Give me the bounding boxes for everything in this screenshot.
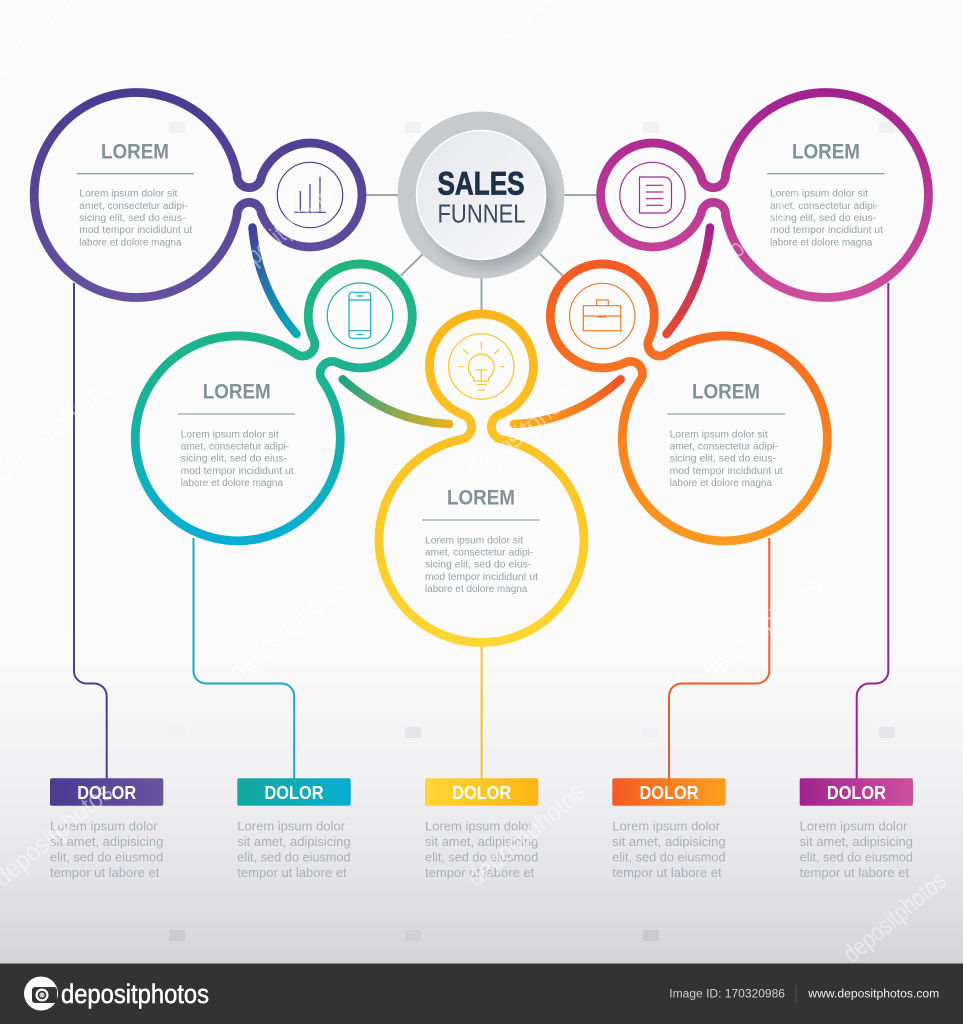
icon: smartphone [327,283,393,348]
description: Lorem ipsum dolor [50,819,158,833]
body text: Lorem ipsum dolor sit [181,429,279,440]
body text: Lorem ipsum dolor sit [770,189,868,200]
connector lines from hub [366,195,597,311]
body text: amet, consectetur adipi- [79,201,188,212]
column: magenta label [800,778,913,880]
orange outline [550,264,827,541]
icon: document [620,162,685,228]
curved connector: purple to green [252,228,296,334]
watermark text overlay: depositphotos [461,776,591,893]
column: yellow label [425,778,538,880]
description: Lorem ipsum dolor [425,819,533,833]
body text: mod tempor incididunt ut [79,225,193,236]
body text: sicing elit, sed do eius- [670,454,776,465]
description: tempor ut labore et [800,866,910,880]
label bar [425,778,538,806]
description: tempor ut labore et [237,866,347,880]
leader line: teal [194,538,294,779]
image id: Image ID: 170320986 [669,989,785,1001]
leader line: yellow [481,644,483,779]
body text: mod tempor incididunt ut [425,572,538,583]
body text: labore et dolore magna [181,478,283,489]
icon: camera logo [24,976,58,1010]
body text: mod tempor incididunt ut [770,225,883,236]
body text [181,429,294,489]
panel: purple node [34,92,362,298]
icon: light bulb [449,334,514,399]
label bar [237,778,351,806]
hub title: SALES: SALES [438,166,524,202]
body text: Lorem ipsum dolor sit [670,429,768,440]
heading: LOREM [101,140,169,163]
body text: labore et dolore magna [670,478,772,489]
curved connector: yellow to orange [514,379,621,424]
column: teal label [237,778,351,880]
description [425,819,538,880]
body text: mod tempor incididunt ut [670,466,783,477]
description: Lorem ipsum dolor [237,819,345,833]
hub: sales funnel [398,112,564,278]
panel: magenta node [601,92,928,297]
description: tempor ut labore et [425,866,535,880]
body text [79,189,193,248]
body text: amet, consectetur adipi- [670,442,778,452]
body text: labore et dolore magna [770,237,873,248]
description [50,819,163,880]
column: purple label: DOLOR [77,783,136,803]
heading: LOREM [203,380,271,403]
label bar [800,778,913,806]
body text: sicing elit, sed do eius- [425,560,531,571]
body text: labore et dolore magna [79,237,182,248]
description [800,819,913,880]
column: orange label [612,778,726,880]
description: elit, sed do eiusmod [800,850,913,864]
description: tempor ut labore et [612,866,722,880]
watermark text overlay: depositphotos [223,570,353,687]
description: Lorem ipsum dolor [612,819,720,833]
description: sit amet, adipisicing [237,835,351,849]
body text: amet, consectetur adipi- [181,442,289,452]
column: purple label [50,778,163,880]
heading: LOREM [447,486,515,509]
column: magenta label: DOLOR [827,783,886,803]
body text: amet, consectetur adipi- [770,201,878,212]
curved connector: magenta to orange [666,228,710,334]
body text: sicing elit, sed do eius- [181,454,287,465]
heading: LOREM [692,380,760,403]
brand name: depositphotos [61,979,209,1009]
column: teal label: DOLOR [264,783,324,803]
panel: yellow node [379,314,584,642]
leader line: purple [74,283,107,779]
description: sit amet, adipisicing [612,835,726,849]
description [612,819,726,880]
footer bar [0,964,963,1024]
description: elit, sed do eiusmod [237,850,351,864]
watermark text overlay: depositphotos [223,181,338,285]
watermark text overlay: depositphotos [461,370,591,487]
body text: labore et dolore magna [425,584,528,595]
green outline [135,264,412,541]
body text [425,535,538,595]
description: Lorem ipsum dolor [800,819,907,833]
purple outline [34,92,362,298]
hub subtitle: FUNNEL: FUNNEL [438,198,526,228]
column: orange label: DOLOR [640,783,698,803]
body text [770,189,883,248]
icon: bar chart [277,162,343,228]
yellow outline [379,314,584,642]
website: www.depositphotos.com [807,989,939,1001]
leader line: orange [669,538,769,779]
body text: mod tempor incididunt ut [181,466,294,477]
body text: sicing elit, sed do eius- [79,213,186,224]
body text: sicing elit, sed do eius- [770,213,876,224]
leader line: magenta [857,283,888,779]
body text: amet, consectetur adipi- [425,548,533,558]
body text: Lorem ipsum dolor sit [79,189,178,200]
watermark text overlay: depositphotos [697,181,812,285]
description: elit, sed do eiusmod [612,850,726,864]
label bar [50,778,163,806]
icon: briefcase [570,283,635,349]
description: sit amet, adipisicing [50,835,163,849]
heading: LOREM [792,140,860,163]
panel: green node [135,264,412,541]
description [237,819,351,880]
faint camera marks [169,122,895,941]
magenta outline [601,92,928,297]
description: sit amet, adipisicing [800,835,913,849]
label bar [612,778,726,806]
description: elit, sed do eiusmod [425,850,538,864]
body text: Lorem ipsum dolor sit [425,535,523,546]
watermark text overlay: depositphotos [697,570,827,687]
description: sit amet, adipisicing [425,835,538,849]
curved connector: green to yellow [343,379,449,424]
description: elit, sed do eiusmod [50,850,163,864]
description: tempor ut labore et [50,866,160,880]
column: yellow label: DOLOR [452,783,511,803]
body text [670,429,783,489]
panel: orange node [550,264,827,541]
